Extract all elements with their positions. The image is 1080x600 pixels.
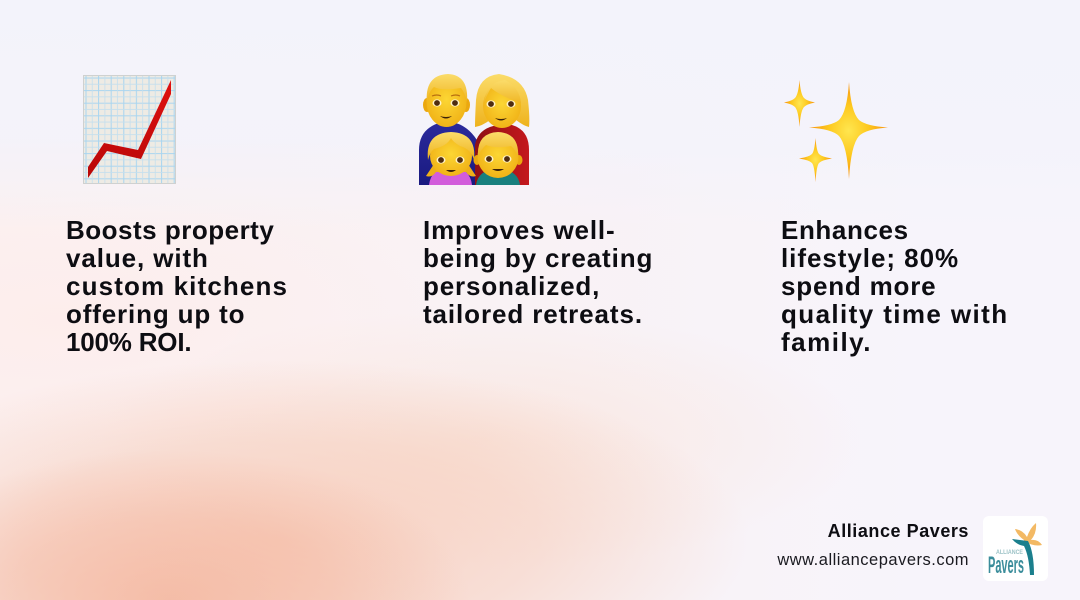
background top wash — [0, 0, 1080, 230]
text: property value: offering up to — [66, 299, 245, 329]
text: well-being: tailored retreats. — [423, 299, 643, 329]
upper sparkle — [784, 80, 815, 127]
red trend line — [88, 80, 171, 178]
text: lifestyle — [781, 215, 1008, 357]
text: lifestyle: spend more — [781, 271, 936, 301]
text: lifestyle: Enhances — [781, 215, 909, 245]
text: well-being: Improves well- — [423, 215, 616, 245]
text: property value — [66, 215, 288, 357]
text: property value: Boosts property — [66, 215, 274, 245]
palm leaves — [1015, 523, 1042, 546]
text: well-being — [423, 215, 653, 329]
text: well-being: personalized, — [423, 271, 600, 301]
text: property value: 100% ROI. — [66, 327, 191, 357]
text: lifestyle: family. — [781, 327, 872, 357]
text: well-being: being by creating — [423, 243, 653, 273]
large sparkle — [809, 82, 888, 179]
icon: family — [419, 74, 530, 185]
palm trunk — [1012, 539, 1034, 575]
text: lifestyle: quality time with — [781, 299, 1008, 329]
lower sparkle — [799, 138, 832, 182]
boy — [474, 132, 522, 185]
icon: sparkles — [784, 80, 888, 182]
text: property value: custom kitchens — [66, 271, 288, 301]
brand name: Alliance Pavers — [828, 521, 969, 541]
website address: www.alliancepavers.com — [777, 551, 969, 569]
text: lifestyle: lifestyle; 80% — [781, 243, 959, 273]
man — [419, 74, 490, 185]
logo: Alliance Pavers — [983, 516, 1048, 581]
icon: chart with upward trend — [83, 75, 176, 184]
logo small text: ALLIANCE — [996, 550, 1023, 556]
girl — [426, 132, 476, 185]
text: property value: value, with — [66, 243, 209, 273]
woman — [475, 74, 529, 185]
